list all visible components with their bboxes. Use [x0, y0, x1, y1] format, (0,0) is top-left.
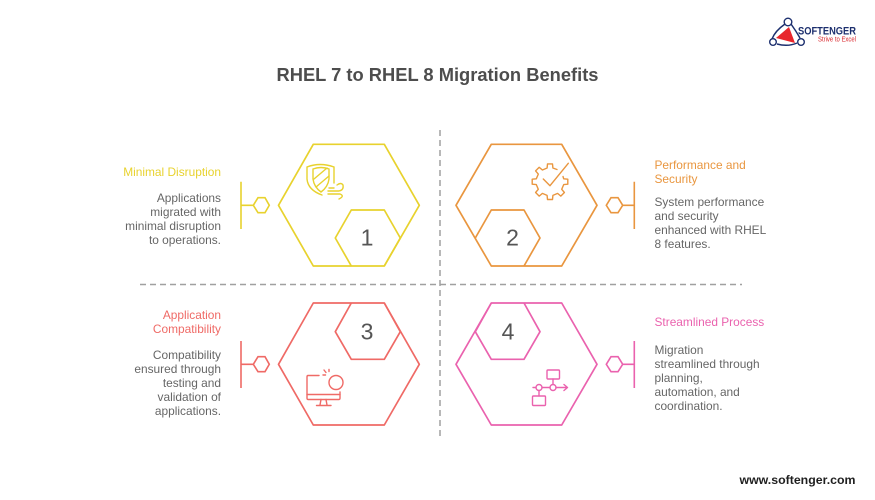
panel: minimal disruption: [123, 144, 419, 266]
heading: performance and security: Security: [654, 172, 698, 186]
number 4: 4: [502, 318, 515, 344]
heading: minimal disruption: Minimal Disruption: [123, 165, 221, 179]
text: compatibility description: validation of: [158, 390, 222, 404]
text: compatibility description: Compatibility: [153, 348, 221, 362]
connector: red: [241, 341, 269, 388]
text: compatibility description: ensured through: [134, 362, 221, 376]
panel: streamlined process: [456, 303, 764, 425]
text: minimal disruption description: migrated with: [150, 205, 221, 219]
text: streamlined description: Migration: [654, 343, 703, 357]
text: compatibility description: testing and: [163, 376, 221, 390]
hexagon: 1: [278, 144, 419, 266]
text: minimal disruption description: to operations.: [149, 233, 221, 247]
website url: www.softenger.com: [738, 475, 856, 487]
hexagon: 3: [278, 303, 419, 425]
text: minimal disruption description: minimal disruption: [125, 219, 221, 233]
text: performance description: enhanced with RHEL: [654, 223, 767, 237]
icon: monitor with alert: [307, 370, 343, 406]
text: minimal disruption description: Applications: [157, 191, 221, 205]
number 3: 3: [361, 318, 373, 344]
logo: Softenger: SOFTENGER: [798, 26, 856, 38]
text: streamlined description: planning,: [654, 371, 703, 385]
heading: streamlined process: Streamlined Process: [654, 315, 764, 329]
heading: application compatibility: Application: [163, 308, 221, 322]
number 2: 2: [506, 224, 519, 250]
heading: application compatibility: Compatibility: [153, 322, 221, 336]
text: streamlined description: coordination.: [654, 399, 723, 413]
panel: application compatibility: [134, 303, 419, 425]
panel: performance and security: [456, 144, 767, 266]
text: performance description: and security: [654, 209, 719, 223]
hexagon: 4: [456, 303, 597, 425]
connector: pink: [606, 341, 634, 388]
icon: shield with wind: [307, 164, 343, 199]
icon: gear with check: [532, 163, 568, 200]
text: streamlined description: automation, and: [654, 385, 740, 399]
connector: yellow: [241, 182, 269, 229]
connector: orange: [606, 182, 634, 229]
logo: Softenger: Strive to Excel: [818, 34, 856, 44]
text: performance description: System performance: [654, 195, 765, 209]
hexagon: 2: [456, 144, 597, 266]
logo: Softenger: [770, 18, 856, 45]
text: compatibility description: applications.: [155, 404, 221, 418]
number 1: 1: [361, 224, 373, 250]
text: performance description: 8 features.: [654, 237, 711, 251]
icon: process flow: [532, 370, 568, 406]
title: RHEL 7 to RHEL 8 Migration Benefits: [276, 64, 598, 85]
text: streamlined description: streamlined through: [654, 357, 760, 371]
heading: performance and security: Performance and: [654, 158, 746, 172]
